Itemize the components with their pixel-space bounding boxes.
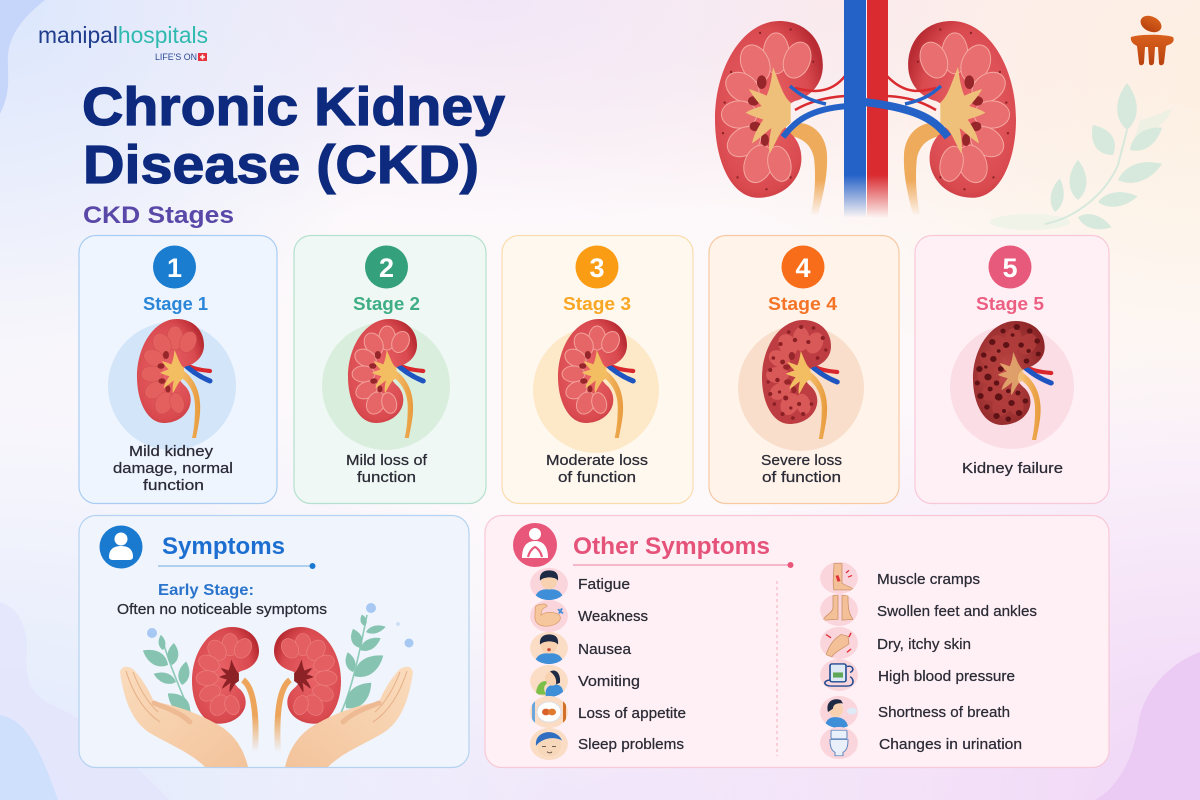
item: weakness: Weakness [578,608,648,625]
badge: 4 [782,246,824,288]
text: early stage: Early Stage: [158,582,254,599]
panel: stage 3 [502,236,693,504]
item: muscle cramps: Muscle cramps [877,571,980,588]
panel: stage 1 [79,236,277,504]
heading: stage 3: Stage 3 [563,294,631,314]
badge: 5: 5 [1002,253,1018,283]
kidneys held in hands [192,627,341,752]
divider with dot [158,563,316,569]
item: weakness [530,600,648,632]
text: description: of function [762,469,841,486]
item: high blood pressure: High blood pressure [878,668,1015,685]
item: vomiting: Vomiting [578,673,640,690]
badge: 5 [988,246,1032,288]
heading: stage 4: Stage 4 [768,294,837,314]
icon: healthy kidney [108,319,236,450]
panel: other symptoms [485,516,1109,768]
logo: manipal hospitals: manipalhospitals [38,22,208,48]
hands [120,667,413,767]
badge: 4: 4 [795,253,811,283]
divider with dot [573,562,794,568]
plants and dots [140,603,414,718]
text: description [113,443,233,494]
heading: stage 5: Stage 5 [976,294,1044,314]
badge: 1: 1 [167,253,182,283]
item: shortness of breath [820,696,1010,728]
item: shortness of breath: Shortness of breath [878,704,1010,721]
text: description: damage, normal [113,460,233,477]
panel: stage 2 [294,236,486,504]
item: swollen feet and ankles: Swollen feet and ankles [877,603,1037,620]
icon: person with hands on chest [513,523,557,567]
item: muscle cramps [820,562,980,594]
item: loss of appetite [530,696,686,728]
heading: stage 2: Stage 2 [353,294,420,314]
item: nausea [530,632,632,664]
item: sleep problems: Sleep problems [578,736,684,753]
icon: failing kidney [950,321,1074,449]
item: changes in urination: Changes in urination [879,736,1022,753]
badge: 1 [153,246,196,288]
icon: mildly damaged kidney [322,319,450,450]
panel: symptoms [79,516,469,768]
item: loss of appetite: Loss of appetite [578,705,686,722]
decorative plant: top right [990,83,1172,234]
badge: 2: 2 [379,253,394,283]
text: description [546,452,648,486]
logo: manipal hospitals [38,22,208,62]
text: description [346,452,428,486]
logo: manipal hospitals: LIFE'S ON [155,52,197,62]
title: Chronic Kidney [82,77,505,137]
item: dry, itchy skin: Dry, itchy skin [877,636,971,653]
heading: CKD Stages: CKD Stages [83,202,234,229]
illustration: kidneys and blood vessels [715,0,1016,218]
item: swollen feet and ankles [820,594,1037,626]
item: nausea: Nausea [578,641,632,658]
badge: 3 [576,246,618,288]
text: description: function [143,477,204,494]
text: description: of function [558,469,636,486]
item: changes in urination [820,727,1022,759]
text: description: Mild loss of [346,452,428,469]
text: description [761,452,842,486]
icon: person [100,526,142,568]
item: sleep problems [530,728,684,760]
text: description: Severe loss [761,452,842,469]
item: vomiting [530,665,640,697]
item: dry, itchy skin [820,627,971,659]
icon: moderately damaged kidney [533,319,659,453]
text: description: function [357,469,416,486]
panel: stage 5 [915,236,1109,504]
item: fatigue: Fatigue [578,576,630,593]
text: often no noticeable symptoms: Often no noticeable symptoms [117,601,327,618]
badge: 2 [365,246,408,288]
title [82,77,505,195]
panel: stage 4 [709,236,899,504]
title: Disease (CKD) [83,135,479,195]
badge: 3: 3 [589,253,605,283]
item: fatigue [530,568,630,600]
item: high blood pressure [820,659,1015,691]
text: description: Mild kidney [129,443,214,460]
heading: symptoms: Symptoms [162,533,285,560]
heading: other symptoms: Other Symptoms [573,533,770,560]
heading: stage 1: Stage 1 [143,294,208,314]
logo: orange figure mark [1131,13,1174,65]
text: description: Kidney failure [962,460,1063,477]
text: description: Moderate loss [546,452,648,469]
icon: severely damaged kidney [738,320,864,451]
